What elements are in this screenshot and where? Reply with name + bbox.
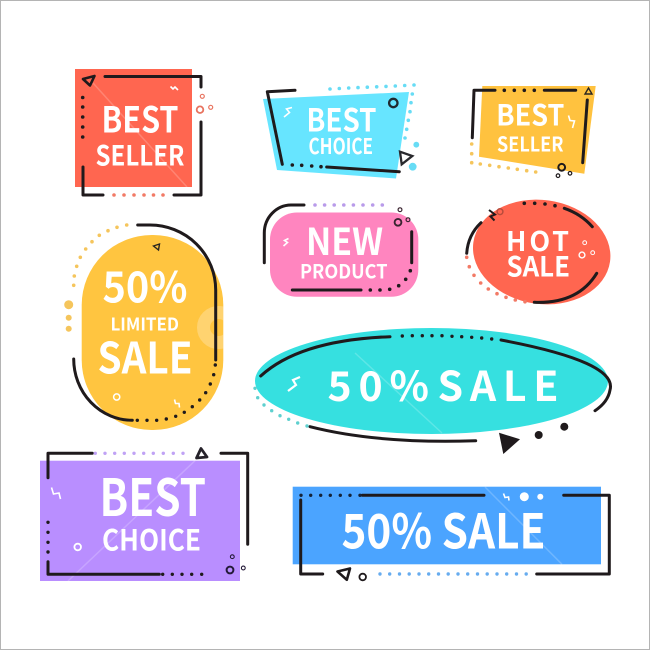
black dots — [81, 96, 84, 139]
heading: CHOICE: CHOICE — [102, 518, 201, 560]
icon: black triangle — [499, 433, 520, 454]
icon: white dots — [520, 492, 543, 501]
yellow pill panel — [82, 235, 223, 430]
red ellipse panel — [466, 191, 617, 313]
heading: SELLER: SELLER — [497, 128, 564, 158]
icon: circles — [395, 208, 410, 226]
heading: HOT: HOT — [506, 220, 569, 259]
red square panel — [75, 69, 192, 187]
black corner and baseline — [267, 90, 399, 172]
heading: 50%: 50% — [328, 353, 429, 413]
badge: 50% limited sale yellow — [64, 223, 234, 430]
heading: SALE: SALE — [98, 324, 192, 386]
purple dots — [94, 452, 185, 455]
icon: triangle — [83, 76, 94, 86]
icon: small ring — [497, 209, 503, 215]
icon: white ring — [74, 544, 81, 550]
heading: PRODUCT: PRODUCT — [300, 255, 388, 284]
icon: black dots — [535, 423, 568, 439]
icon: circles — [556, 164, 572, 178]
icon: squiggle — [504, 494, 509, 500]
black dots — [522, 202, 557, 208]
yellow polygon panel — [479, 86, 596, 174]
black dots — [136, 363, 217, 422]
icon: triangle — [585, 88, 592, 94]
black dots — [401, 334, 493, 341]
icon: squiggle — [284, 108, 292, 117]
badge: best choice cyan — [263, 83, 419, 178]
black frame lines — [83, 76, 201, 195]
yellow dots — [64, 223, 128, 332]
salmon dots — [465, 255, 527, 304]
black dots — [502, 88, 536, 92]
badge: 50% sale teal oval — [253, 328, 611, 454]
badge: hot sale red oval — [465, 191, 617, 313]
heading: 50%: 50% — [102, 253, 188, 315]
icon: zigzag — [489, 210, 495, 220]
heading: SALE: SALE — [506, 246, 570, 286]
icon: squiggle — [52, 488, 60, 499]
badge: 50% sale blue — [293, 487, 609, 580]
icon: ring — [389, 99, 397, 107]
blue rectangle panel — [293, 487, 601, 564]
icon: squiggle — [284, 238, 288, 246]
icon: squiggle — [174, 400, 180, 408]
heading: NEW: NEW — [306, 212, 383, 266]
cyan trapezoid panel — [263, 92, 409, 178]
icon: triangle — [338, 568, 350, 580]
badge: best seller yellow — [470, 86, 596, 178]
icon: white ring — [114, 394, 120, 400]
heading: 50% SALE: 50% SALE — [342, 493, 546, 562]
teal ellipse panel — [255, 328, 608, 434]
purple dots — [313, 203, 384, 207]
icon: white circles — [579, 241, 595, 258]
icon: squiggle — [288, 377, 300, 391]
black arcs — [74, 225, 216, 420]
purple rectangle panel — [40, 461, 240, 581]
black frame lines — [301, 495, 609, 574]
heading: SALE: SALE — [438, 353, 558, 413]
icon: triangle — [196, 448, 207, 458]
heading: SELLER: SELLER — [96, 135, 184, 175]
label: LIMITED: LIMITED — [110, 311, 179, 337]
black arcs — [467, 208, 597, 302]
black arcs — [261, 337, 611, 441]
black frame lines — [48, 453, 248, 574]
black lines — [264, 205, 412, 290]
black dots — [368, 269, 412, 292]
black lines — [472, 90, 587, 163]
icon: squiggle — [568, 116, 574, 128]
heading: BEST: BEST — [102, 93, 178, 144]
icon: circles — [197, 94, 213, 113]
badge: best seller red square — [75, 69, 213, 197]
badge: best choice purple — [40, 448, 248, 581]
black dots — [46, 521, 203, 576]
blue dots — [378, 572, 528, 576]
heading: BEST: BEST — [306, 96, 376, 142]
black dots — [290, 163, 323, 168]
icon: triangle — [154, 244, 160, 250]
heading: BEST: BEST — [100, 457, 206, 531]
icon: ring — [359, 574, 366, 580]
icon: triangle — [400, 152, 412, 164]
heading: CHOICE: CHOICE — [308, 130, 373, 161]
heading: BEST: BEST — [496, 93, 564, 135]
pink rounded panel — [270, 212, 418, 297]
salmon dots — [112, 193, 165, 197]
yellow dots — [470, 142, 538, 174]
black dots — [299, 494, 362, 497]
icon: squiggle — [170, 86, 178, 90]
badge: new product pink — [264, 203, 418, 297]
cyan dots — [328, 83, 419, 171]
teal dots — [253, 387, 309, 428]
icon: circles — [227, 555, 245, 573]
